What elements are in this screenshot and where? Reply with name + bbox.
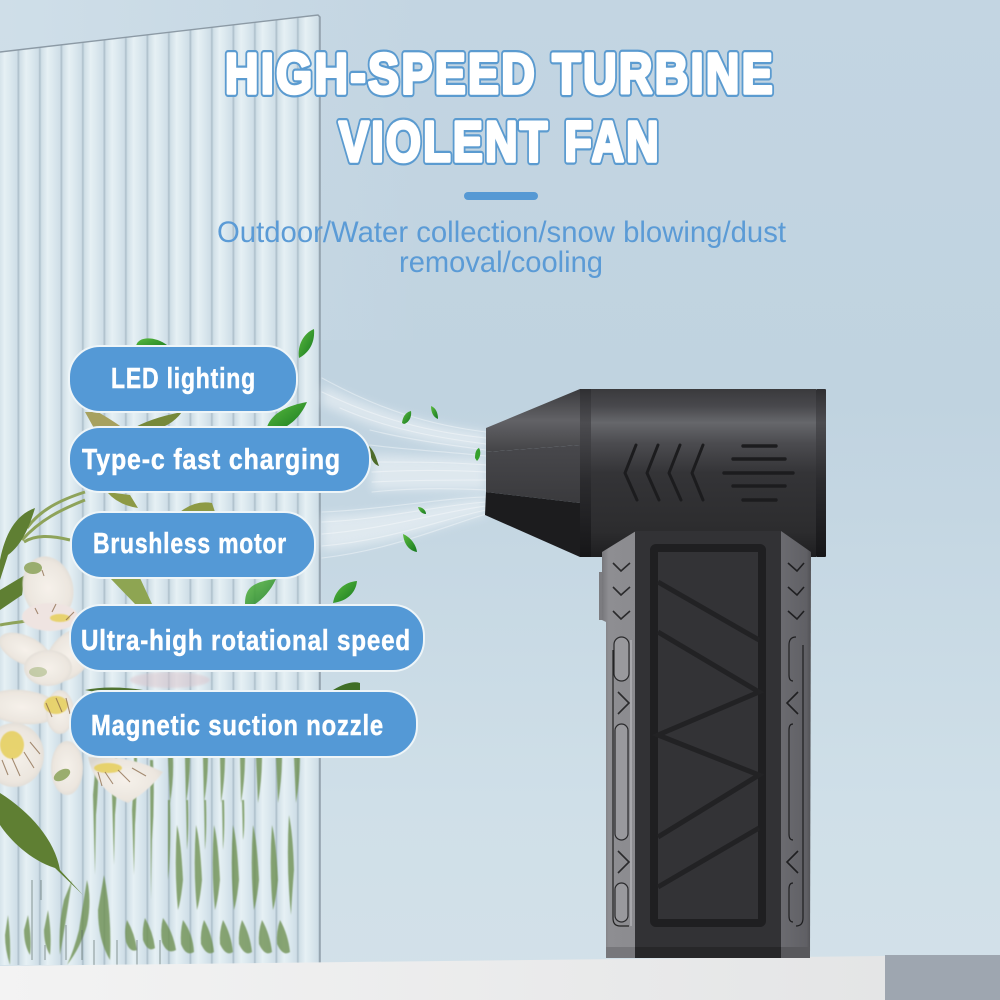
feature pill: Brushless motor: Brushless motor bbox=[93, 528, 287, 560]
leaf bbox=[402, 411, 411, 424]
title: HIGH-SPEED TURBINE bbox=[225, 42, 775, 106]
olive leaf bits bbox=[85, 412, 215, 604]
side button bbox=[599, 572, 605, 620]
feature pill: Type-c fast charging: Type-c fast charging bbox=[82, 444, 341, 476]
chevron vents bbox=[625, 445, 703, 500]
right slots bbox=[789, 637, 803, 926]
leaf bbox=[299, 329, 314, 358]
feature pill: Ultra-high rotational speed bbox=[70, 605, 424, 671]
feature pill: Brushless motor bbox=[71, 512, 315, 578]
handle right side bbox=[781, 531, 811, 958]
feature pill: Magnetic suction nozzle: Magnetic suction nozzle bbox=[91, 710, 384, 742]
feature pill: Type-c fast charging bbox=[69, 427, 370, 492]
feature pill: Ultra-high rotational speed: Ultra-high rotational speed bbox=[81, 625, 411, 657]
left chevrons bbox=[613, 563, 630, 873]
title: HIGH-SPEED TURBINE bbox=[225, 42, 775, 106]
feature pill: Magnetic suction nozzle bbox=[70, 691, 417, 757]
leaf bbox=[369, 446, 379, 466]
flower petals bbox=[0, 551, 163, 803]
subtitle: removal/cooling bbox=[399, 246, 603, 279]
fluted glass panel with distorted plant bbox=[0, 0, 320, 970]
product: jet fan bbox=[485, 389, 826, 958]
nozzle collar bbox=[580, 389, 591, 557]
leaf bbox=[475, 448, 480, 461]
leaf bbox=[136, 338, 167, 350]
subtitle bbox=[217, 216, 787, 279]
leaf bbox=[333, 581, 357, 603]
leaf bbox=[403, 534, 417, 552]
title accent bar bbox=[464, 192, 538, 200]
title: VIOLENT FAN bbox=[339, 110, 661, 174]
right chevrons bbox=[787, 563, 804, 873]
panel diagonals bbox=[658, 582, 759, 887]
left slots bbox=[614, 637, 629, 922]
flowers and stems behind pills bbox=[0, 412, 360, 895]
barrel bbox=[591, 389, 816, 557]
airflow bbox=[322, 378, 486, 558]
stems bbox=[0, 492, 85, 625]
handle left side bbox=[602, 531, 636, 958]
glass right edge bbox=[0, 15, 320, 965]
nozzle bbox=[485, 389, 580, 557]
leaf bbox=[267, 402, 307, 430]
line vents bbox=[724, 446, 793, 500]
flying leaves bbox=[136, 329, 480, 606]
handle centre bbox=[635, 531, 781, 958]
feature pill: LED lighting bbox=[69, 346, 297, 412]
feature pill: LED lighting: LED lighting bbox=[111, 363, 256, 395]
title: VIOLENT FAN bbox=[339, 110, 661, 174]
subtitle: Outdoor/Water collection/snow blowing/dust bbox=[217, 216, 787, 249]
floor bbox=[0, 955, 1000, 1000]
flower leaves bbox=[0, 508, 360, 895]
base band bbox=[606, 947, 810, 958]
leaf bbox=[431, 406, 438, 419]
end cap bbox=[816, 389, 826, 557]
title bbox=[225, 42, 775, 174]
leaf bbox=[418, 507, 426, 514]
inner panel bbox=[654, 548, 762, 923]
leaf bbox=[245, 579, 276, 606]
